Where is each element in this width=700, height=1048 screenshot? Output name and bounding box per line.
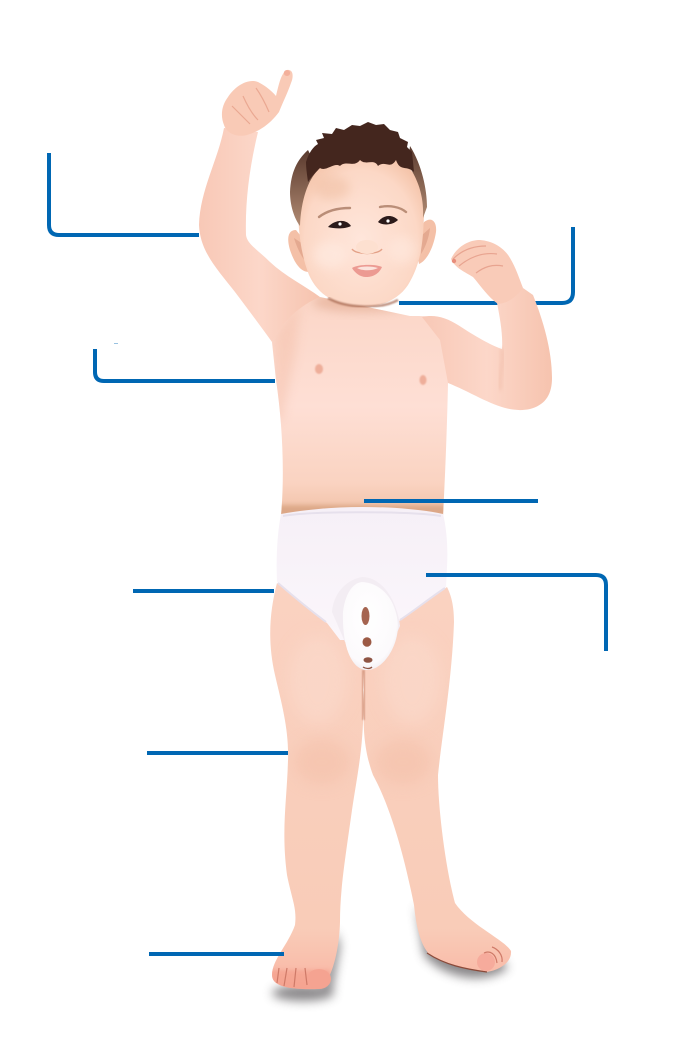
connector line: knee left bbox=[147, 751, 288, 755]
bent right arm bbox=[422, 288, 552, 410]
chin shade bbox=[328, 298, 398, 307]
head bbox=[288, 122, 436, 307]
connector line: hip left bbox=[133, 589, 274, 593]
leg shading bbox=[272, 659, 430, 989]
nipples bbox=[315, 364, 426, 385]
torso bbox=[272, 297, 450, 516]
connector line: left arm bbox=[49, 153, 199, 235]
ears bbox=[288, 230, 312, 272]
hip fold bbox=[278, 512, 445, 622]
connector line: left torso bbox=[95, 349, 275, 381]
elbow crease bbox=[500, 349, 503, 390]
right hand with curled fingers bbox=[451, 240, 523, 304]
torso shading bbox=[272, 292, 446, 519]
raised left arm bbox=[199, 128, 320, 342]
white abduction cup bbox=[332, 577, 400, 670]
toes bbox=[277, 947, 502, 989]
mouth bbox=[352, 265, 382, 277]
baby figure bbox=[199, 70, 552, 992]
forehead shade bbox=[314, 176, 350, 200]
foot shadows bbox=[272, 905, 508, 1001]
face bbox=[298, 150, 424, 306]
cheeks bbox=[313, 241, 347, 269]
faint stray mark bbox=[114, 343, 118, 344]
eyebrows bbox=[319, 206, 406, 217]
connector line: briefs right bbox=[426, 575, 606, 651]
connector line: waist bbox=[364, 499, 538, 503]
hair sides bbox=[290, 150, 318, 226]
eyes bbox=[328, 216, 398, 228]
nose bbox=[352, 249, 382, 254]
hair top bbox=[306, 122, 414, 182]
support briefs bbox=[277, 507, 447, 640]
infographic canvas bbox=[47, 70, 608, 1008]
legs bbox=[270, 583, 511, 989]
connector line: foot left bbox=[149, 952, 284, 956]
raised hand with thumb up bbox=[222, 70, 293, 136]
connector line: behind right hand (top right) bbox=[399, 227, 573, 303]
